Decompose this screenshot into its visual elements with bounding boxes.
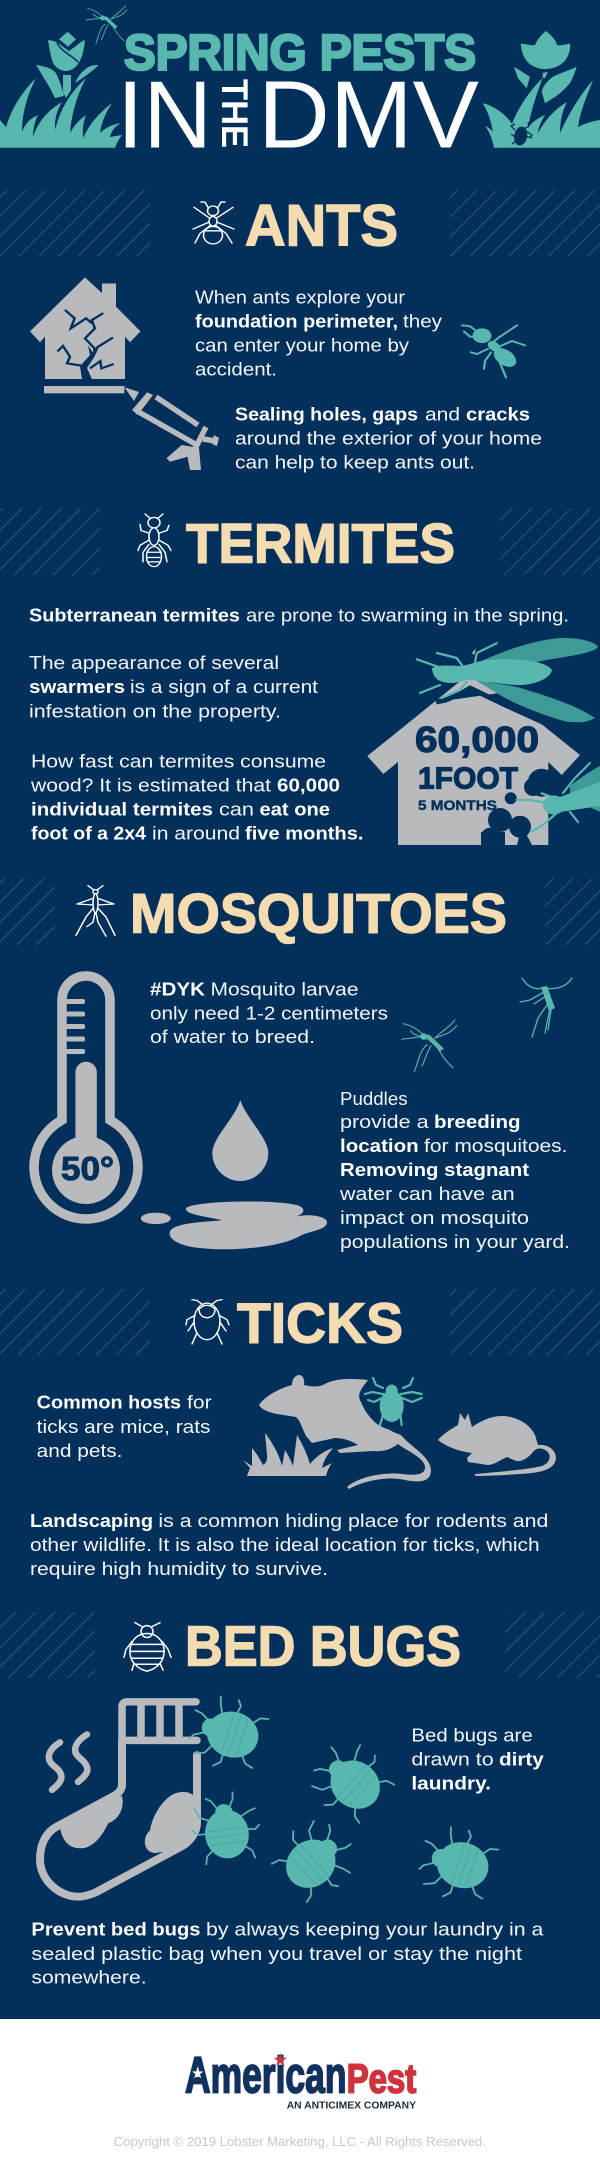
logo: american pest: Pest	[347, 2056, 416, 2102]
icon: termite house	[367, 670, 580, 846]
stat: 60,000: 60,000	[415, 719, 539, 760]
copyright: Copyright © 2019 Lobster Marketing, LLC - All Rights Reserved.	[114, 2135, 486, 2149]
text: dirty laundry: Bed bugs are	[411, 1725, 533, 1745]
text: swarmers: swarmers	[29, 677, 125, 697]
text: sealing: around the exterior of your home	[235, 429, 542, 449]
logo: american pest: American	[185, 2047, 346, 2104]
text: how fast: foot of a 2x4	[31, 823, 146, 843]
text: common hosts: Common hosts	[37, 1393, 181, 1413]
left tulip and grass	[0, 32, 122, 148]
heading: ticks: TICKS	[237, 1292, 403, 1356]
text: prevent bed bugs	[31, 1920, 545, 1988]
icon: winged termite	[417, 638, 598, 730]
icon: chewing termite	[517, 763, 600, 832]
stripe band	[0, 190, 600, 256]
panel: mosquitoes	[0, 878, 600, 1252]
label: 50 degrees: 50°	[61, 1150, 114, 1187]
text: how fast: 60,000	[277, 775, 340, 795]
text: sealing	[235, 405, 542, 473]
text: swarmers	[29, 653, 318, 721]
footer	[0, 2019, 600, 2183]
text: ants explore	[195, 287, 442, 379]
text: dirty laundry: drawn to	[411, 1750, 494, 1770]
text: puddles: Removing stagnant	[340, 1160, 529, 1180]
heading: bed bugs: BED BUGS	[185, 1615, 461, 1679]
icon: teal mosquito left	[402, 1020, 457, 1071]
text: ants explore: can enter your home by	[195, 336, 409, 356]
header	[0, 6, 600, 169]
text: landscaping: Landscaping	[30, 1511, 153, 1531]
icon: water drop and puddle	[141, 1100, 327, 1249]
text: dyk	[150, 979, 388, 1047]
title: dmv: DMV	[258, 62, 479, 169]
panel: termites	[0, 508, 600, 846]
text: ants explore: they	[403, 312, 442, 332]
text: common hosts	[37, 1393, 212, 1461]
stat: 5 months: 5 MONTHS	[418, 797, 497, 813]
right tulip and grass	[483, 31, 600, 148]
icons: bed bugs	[181, 1689, 501, 1909]
icon: teal tick	[359, 1378, 422, 1430]
text: dirty laundry: laundry.	[411, 1774, 491, 1794]
chewed holes	[481, 769, 556, 846]
text: puddles: populations in your yard.	[340, 1232, 570, 1252]
icon: teal ant	[462, 325, 525, 378]
panel: ants	[0, 190, 600, 473]
text: how fast: eat one	[260, 799, 330, 819]
heading: termites: TERMITES	[186, 512, 455, 575]
text: swarmers: is a sign of a current	[130, 677, 318, 697]
panel: bed bugs	[0, 1612, 600, 1988]
icon: thermometer	[34, 976, 138, 1219]
text: prevent bed bugs: somewhere.	[31, 1968, 147, 1988]
icon: cracked house	[30, 277, 140, 393]
text: dyk: of water to breed.	[150, 1027, 315, 1047]
stat: 1 foot: 1FOOT	[418, 760, 518, 795]
text: puddles: water can have an	[339, 1184, 515, 1204]
text: puddles: provide a	[340, 1112, 430, 1132]
stripe band	[0, 1612, 600, 1678]
text: prevent bed bugs: Prevent bed bugs	[31, 1920, 200, 1940]
text: ants explore: foundation perimeter,	[195, 312, 398, 332]
text: puddles: location	[340, 1136, 419, 1156]
text: swarmers: infestation on the property.	[29, 701, 281, 721]
icon: mouse	[438, 1413, 556, 1476]
stripe band	[0, 1289, 600, 1355]
text: subterranean: are prone to swarming in the spring.	[246, 605, 569, 625]
icon: smelly sock	[40, 1702, 201, 1897]
title: the: THE	[214, 79, 255, 148]
text: dyk: #DYK	[150, 979, 205, 999]
title: in: IN	[117, 62, 212, 169]
text: swarmers: The appearance of several	[29, 653, 279, 673]
text: landscaping: is a common hiding place for rodents and	[158, 1511, 548, 1531]
text: how fast	[30, 751, 364, 843]
text: common hosts: for	[187, 1393, 212, 1413]
text: ants explore: When ants explore your	[195, 287, 405, 307]
text: puddles: impact on mosquito	[340, 1208, 529, 1228]
text: prevent bed bugs: sealed plastic bag when you travel or stay the night	[31, 1944, 522, 1964]
text: sealing: cracks	[466, 405, 530, 425]
title: spring pests: SPRING PESTS	[124, 24, 476, 80]
text: sealing: can help to keep ants out.	[235, 453, 475, 473]
text: dyk: only need 1-2 centimeters	[150, 1003, 388, 1023]
text: common hosts: and pets.	[37, 1441, 123, 1461]
text: subterranean	[29, 605, 569, 625]
logo: american pest: AN ANTICIMEX COMPANY	[287, 2100, 416, 2112]
panel: ticks	[0, 1289, 600, 1579]
text: how fast: How fast can termites consume	[31, 751, 326, 771]
icon: grass tuft	[243, 1433, 333, 1476]
icon: teal mosquito right	[520, 978, 572, 1037]
text: landscaping	[30, 1511, 548, 1579]
text: puddles: breeding	[434, 1112, 520, 1132]
text: sealing: Sealing holes, gaps	[235, 405, 418, 425]
text: puddles	[339, 1089, 570, 1252]
icon: bed bug outline	[124, 1623, 171, 1671]
stripe band	[0, 878, 600, 945]
heading: ants: ANTS	[245, 193, 398, 258]
icon: mosquito outline	[76, 886, 115, 936]
text: prevent bed bugs: by always keeping your laundry in a	[206, 1920, 545, 1940]
stripe band	[0, 508, 600, 575]
text: dirty laundry	[411, 1725, 544, 1794]
icon: caulk gun	[124, 387, 219, 470]
text: puddles: for mosquitoes.	[424, 1136, 568, 1156]
text: how fast: individual termites	[31, 799, 213, 819]
icon: tick outline	[186, 1300, 229, 1344]
text: landscaping: require high humidity to survive.	[30, 1559, 328, 1579]
icon: termite outline	[138, 514, 171, 567]
icon: tick on grass	[511, 122, 532, 146]
text: dirty laundry: dirty	[499, 1750, 544, 1770]
text: common hosts: ticks are mice, rats	[37, 1417, 211, 1437]
text: how fast: wood? It is estimated that	[30, 775, 271, 795]
text: landscaping: other wildlife. It is also the ideal location for ticks, which	[30, 1535, 540, 1555]
icon: rat	[259, 1375, 431, 1489]
text: how fast: can	[219, 799, 254, 819]
text: sealing: and	[425, 405, 460, 425]
text: ants explore: accident.	[195, 359, 277, 379]
icon: mosquito	[86, 6, 127, 44]
icon: ant outline	[193, 202, 234, 244]
text: puddles: Puddles	[340, 1089, 408, 1109]
text: how fast: five months.	[245, 823, 364, 843]
text: how fast: in around	[152, 823, 240, 843]
heading: mosquitoes: MOSQUITOES	[130, 882, 507, 945]
text: subterranean: Subterranean termites	[29, 605, 240, 625]
text: dyk: Mosquito larvae	[210, 979, 358, 999]
